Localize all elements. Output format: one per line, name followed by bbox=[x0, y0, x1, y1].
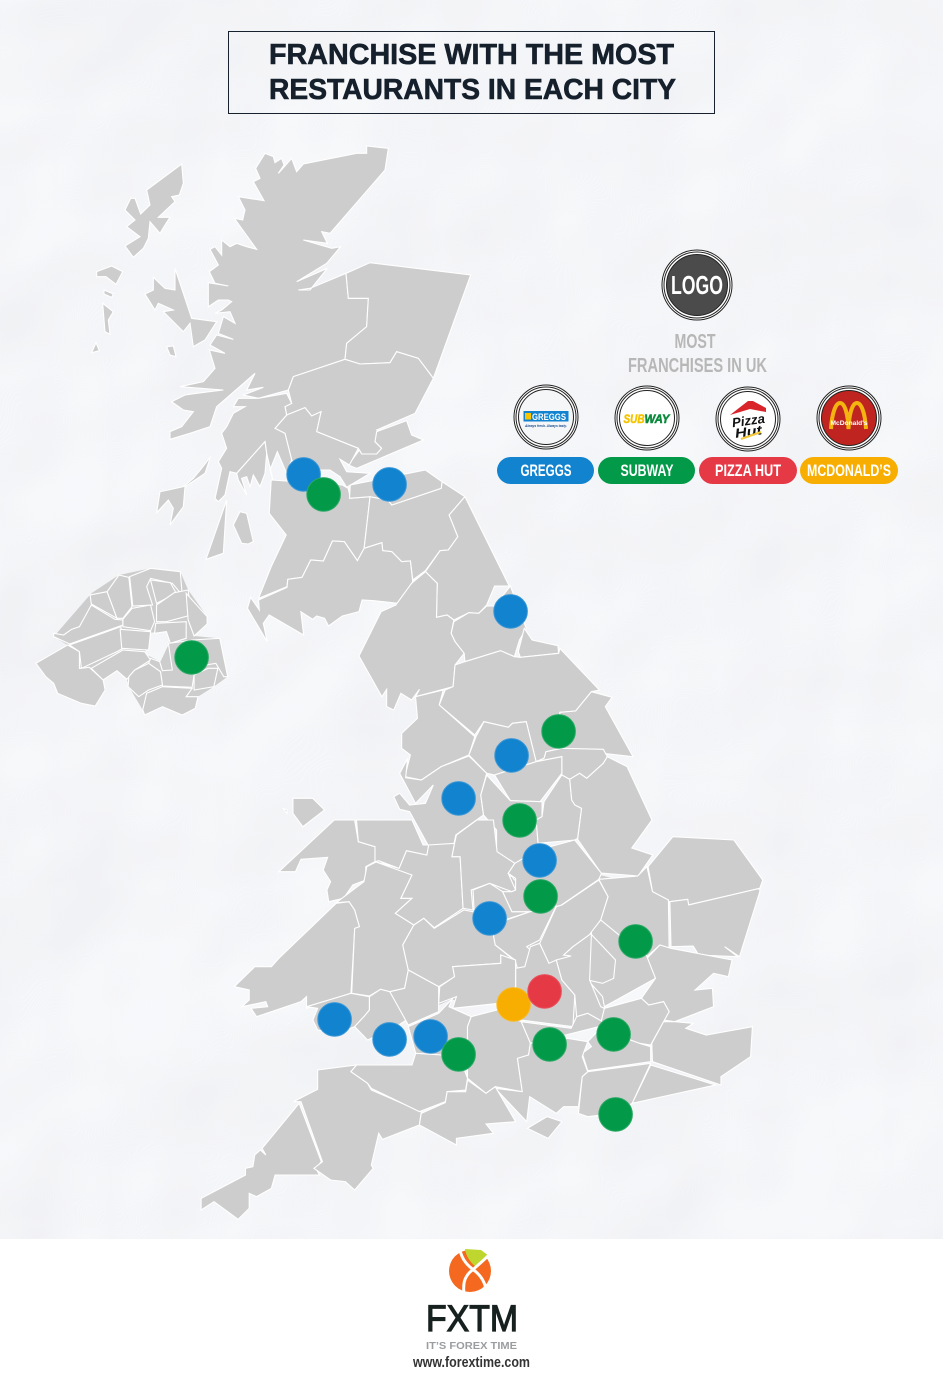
icon: Subway logo: WAY bbox=[644, 414, 671, 426]
location markers bbox=[175, 458, 652, 1131]
legend pill: Subway bbox=[598, 457, 695, 484]
legend pill: Pizza Hut bbox=[699, 457, 797, 484]
icon: Subway logo: SUB bbox=[624, 414, 644, 426]
legend pill: McDonald's bbox=[800, 457, 898, 484]
FXTM wordmark: FXTM bbox=[426, 1298, 518, 1339]
icon: Greggs logo: Always fresh. Always tasty. bbox=[524, 423, 567, 428]
Wales, the Midlands and southern England bbox=[201, 820, 763, 1219]
icon: Subway logo bbox=[615, 386, 679, 450]
Northern Ireland and northern England bbox=[36, 470, 653, 880]
legend pill: McDonald's: MCDONALD’S bbox=[807, 461, 891, 480]
icon: FXTM emblem bbox=[449, 1249, 491, 1294]
legend caption bbox=[628, 331, 767, 377]
title: FRANCHISE WITH THE MOST bbox=[269, 39, 675, 71]
icon: Pizza Hut logo bbox=[716, 387, 780, 451]
legend pill: Greggs bbox=[497, 457, 594, 484]
legend caption: MOST bbox=[674, 331, 716, 353]
icon: McDonald's logo: McDonald's bbox=[830, 420, 868, 427]
website address: www.forextime.com bbox=[412, 1354, 530, 1371]
footer band bbox=[0, 1239, 943, 1381]
title bbox=[228, 32, 714, 114]
icon: Greggs logo: GREGGS bbox=[532, 412, 566, 422]
title: RESTAURANTS IN EACH CITY bbox=[269, 74, 676, 106]
legend pill: Pizza Hut: PIZZA HUT bbox=[715, 461, 781, 480]
legend pill: Greggs: GREGGS bbox=[520, 461, 572, 480]
icon: logo key badge bbox=[662, 250, 732, 320]
icon: Pizza Hut logo: Hut bbox=[734, 422, 764, 441]
tagline: IT’S FOREX TIME bbox=[426, 1340, 517, 1352]
icon: logo key badge: LOGO bbox=[671, 270, 723, 300]
Scotland bbox=[92, 146, 471, 559]
icon: McDonald's logo bbox=[817, 386, 881, 450]
icon: Greggs logo bbox=[514, 385, 578, 449]
icon: Pizza Hut logo: Pizza bbox=[731, 411, 766, 430]
legend pill: Subway: SUBWAY bbox=[620, 461, 674, 480]
legend caption: FRANCHISES IN UK bbox=[628, 355, 767, 377]
map of the UK bbox=[36, 146, 763, 1219]
